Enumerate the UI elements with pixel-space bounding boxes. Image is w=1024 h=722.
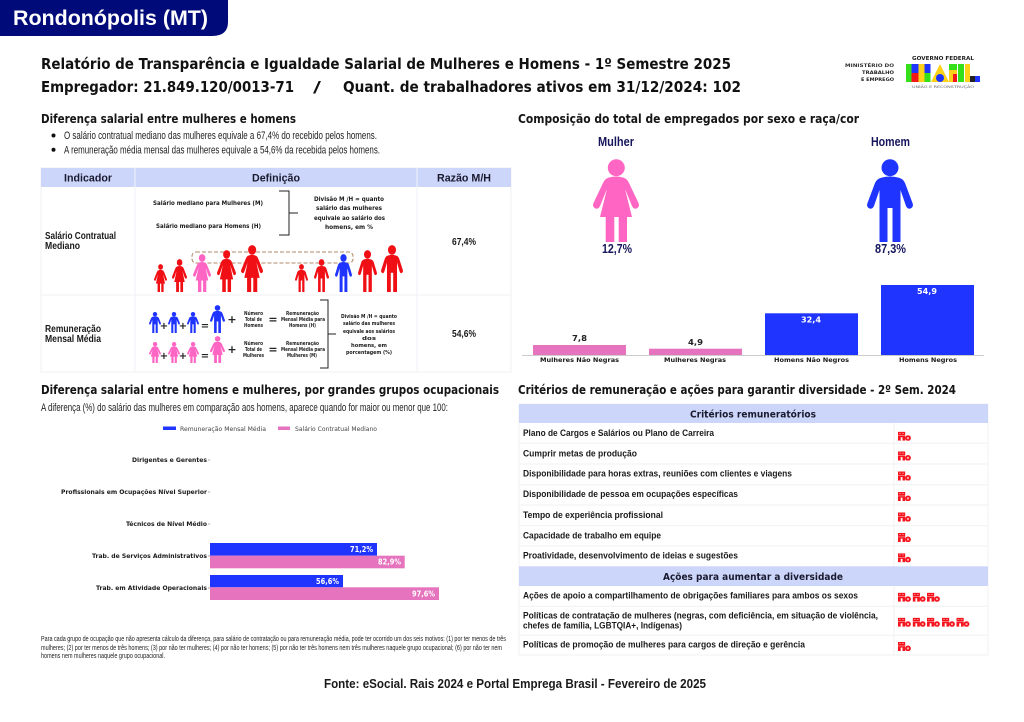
header: remuneration criteria: Critérios remuneratórios xyxy=(690,408,816,420)
legend: occupational chart xyxy=(163,425,377,433)
header: remuneration criteria xyxy=(519,404,988,423)
bracket: median definition xyxy=(279,191,298,235)
text block: footnote: Para cada grupo de ocupação que não apresenta cálculo da diferença, para salário de contratação ou para remuneração média, pode ter ocorrido um dos seis motivos: (1) por ter menos de três xyxy=(41,636,506,643)
row label: average pay: Remuneração xyxy=(45,323,101,335)
bar chart: occupational groups: Técnicos de Nível Médio xyxy=(126,520,208,528)
panel: criteria table xyxy=(519,404,988,655)
definition: division text: equivale ao salário dos xyxy=(314,214,385,222)
logos: ministry and federal government xyxy=(845,56,980,89)
row label: contractual salary xyxy=(45,231,116,252)
rows: diversity actions xyxy=(523,591,968,651)
bar chart: occupational groups: Trab. de Serviços Administrativos xyxy=(92,552,207,560)
logos: ministry and federal government: E EMPREGO xyxy=(861,77,894,83)
bar chart: sex and race composition: Mulheres Não Negras xyxy=(540,356,619,364)
bar chart: sex and race composition: 32,4 xyxy=(801,316,821,324)
logos: ministry and federal government: MINISTÉRIO DO xyxy=(845,61,894,69)
rows: diversity actions: Ações de apoio a compartilhamento de obrigações familiares para ambos os sexos xyxy=(523,591,858,602)
heading: occupational groups: Diferença salarial entre homens e mulheres, por grandes grupos ocupacionais xyxy=(41,382,499,397)
heading: composition: Composição do total de empregados por sexo e raça/cor xyxy=(518,111,860,126)
value: average pay ratio: 54,6% xyxy=(452,328,477,340)
panel: man share xyxy=(867,134,913,256)
bar chart: occupational groups: 71,2% xyxy=(350,545,373,554)
row label: average pay: Mensal Média xyxy=(45,333,101,345)
bar chart: occupational groups xyxy=(61,456,439,600)
definition: median salary labels xyxy=(153,199,263,230)
rows: remuneration criteria: Plano de Cargos e Salários ou Plano de Carreira xyxy=(523,428,715,439)
text block: salary bullets xyxy=(52,130,380,156)
logos: ministry and federal government: GOVERNO FEDERAL xyxy=(912,56,974,62)
icon row: median people xyxy=(154,245,403,292)
bar chart: sex and race composition: Mulheres Negras xyxy=(664,356,726,364)
rows: diversity actions: Políticas de contratação de mulheres (negras, com deficiência, em situação de violência, xyxy=(523,610,878,621)
rows: remuneration criteria: Capacidade de trabalho em equipe xyxy=(523,530,661,541)
bar chart: occupational groups: Trab. em Atividade Operacionais xyxy=(96,584,207,592)
title: Empregador: 21.849.120/0013-71 xyxy=(41,78,294,96)
panel: indicator table xyxy=(41,168,511,372)
panel: indicator table: Razão M/H xyxy=(437,172,491,184)
definition: division text, average pay: dos xyxy=(362,336,376,342)
formula: women average pay: = xyxy=(201,351,209,362)
definition: division text, average pay: equivale aos salários xyxy=(343,328,395,335)
formula: women average pay: + xyxy=(227,343,237,356)
row label: contractual salary: Salário Contratual xyxy=(45,231,116,242)
bar chart: sex and race composition xyxy=(522,285,984,364)
definition: division text: salário das mulheres xyxy=(316,204,382,212)
bar chart: sex and race composition: Homens Negros xyxy=(899,356,957,364)
bar chart: sex and race composition: Homens Não Negros xyxy=(774,356,849,364)
rows: remuneration criteria: Proatividade, desenvolvimento de ideias e sugestões xyxy=(523,551,738,562)
header: diversity actions: Ações para aumentar a diversidade xyxy=(663,572,843,583)
formula: women average pay: + xyxy=(179,351,187,362)
bar chart: occupational groups: Profissionais em Ocupações Nível Superior xyxy=(61,488,208,496)
rows: remuneration criteria: Tempo de experiência profissional xyxy=(523,510,663,521)
rows: remuneration criteria xyxy=(523,428,910,562)
text block: salary bullets: O salário contratual mediano das mulheres equivale a 67,4% do recebido pelos homens. xyxy=(64,130,377,142)
text block: salary bullets: A remuneração média mensal das mulheres equivale a 54,6% da recebida pelos homens. xyxy=(64,144,380,156)
logos: ministry and federal government: UNIÃO E RECONSTRUÇÃO xyxy=(912,84,974,89)
bar chart: sex and race composition: 4,9 xyxy=(688,338,703,347)
formula: men average pay: + xyxy=(160,321,168,332)
formula: women average pay: Total de xyxy=(245,347,263,353)
formula: men average pay: Homens xyxy=(244,323,263,329)
panel: woman share xyxy=(593,134,639,256)
rows: diversity actions: chefes de família, LGBTQIA+, Indígenas) xyxy=(523,620,682,631)
formula: women average pay: + xyxy=(160,351,168,362)
panel: indicator table: Indicador xyxy=(64,172,113,184)
formula: women average pay: Número xyxy=(244,340,264,347)
definition: division text, average pay: salário das mulheres xyxy=(343,320,395,327)
panel: woman share: 12,7% xyxy=(602,241,632,256)
row label: contractual salary: Mediano xyxy=(45,241,80,252)
bar chart: occupational groups: 56,6% xyxy=(316,577,339,586)
definition: division text xyxy=(314,195,385,231)
banner: city name xyxy=(0,0,228,36)
text block: footnote: mulheres; (2) por ter menos de três homens; (3) por não ter mulheres; (4) por não ter homens; (5) por não ter três homens nem três mulheres naquele grupo ocupacional; (6) por não ter nem xyxy=(41,645,502,652)
bar chart: occupational groups: 82,9% xyxy=(378,558,401,566)
definition: division text: homens, em % xyxy=(325,223,374,231)
formula: women average pay: Mulheres (M) xyxy=(287,353,317,359)
logos: ministry and federal government: TRABALHO xyxy=(862,70,894,76)
formula: men average pay: Homens (H) xyxy=(289,323,316,329)
formula: men average pay: = xyxy=(268,313,278,326)
value: median ratio: 67,4% xyxy=(452,236,477,248)
definition: division text, average pay xyxy=(341,314,397,356)
definition: division text: Divisão M /H = quanto xyxy=(314,195,385,203)
formula: men average pay xyxy=(149,305,325,333)
formula: men average pay: Remuneração xyxy=(286,311,320,317)
panel: woman share: Mulher xyxy=(598,134,634,149)
heading: salary difference: Diferença salarial entre mulheres e homens xyxy=(41,111,296,126)
bracket: average pay definition xyxy=(320,300,336,368)
definition: median salary labels: Salário mediano para Mulheres (M) xyxy=(153,199,263,207)
rows: remuneration criteria: Disponibilidade de pessoa em ocupações específicas xyxy=(523,489,738,500)
panel: indicator table: Definição xyxy=(252,172,300,184)
rows: diversity actions: Políticas de promoção de mulheres para cargos de direção e gerência xyxy=(523,639,806,650)
text block: occupational note: A diferença (%) do salário das mulheres em comparação aos homens, aparece quando for maior ou menor que 100: xyxy=(41,402,448,414)
formula: men average pay: + xyxy=(179,321,187,332)
legend: occupational chart: Remuneração Mensal Média xyxy=(180,425,266,433)
legend: occupational chart: Salário Contratual Mediano xyxy=(295,425,377,433)
formula: men average pay: Número xyxy=(244,310,264,317)
row label: average pay xyxy=(45,323,101,345)
formula: women average pay: Mensal Média para xyxy=(281,346,325,353)
header: diversity actions xyxy=(519,566,988,586)
text block: footnote: homens nem mulheres naquele grupo ocupacional. xyxy=(41,653,165,660)
formula: men average pay: = xyxy=(201,321,209,332)
source note: Fonte: eSocial. Rais 2024 e Portal Emprega Brasil - Fevereiro de 2025 xyxy=(324,676,706,691)
title xyxy=(41,55,741,96)
bar chart: sex and race composition: 7,8 xyxy=(572,334,587,343)
rows: remuneration criteria: Cumprir metas de produção xyxy=(523,448,637,459)
bar chart: sex and race composition: 54,9 xyxy=(917,287,937,296)
definition: division text, average pay: homens, em xyxy=(351,343,387,349)
panel: man share: 87,3% xyxy=(875,241,906,256)
bar chart: occupational groups: Dirigentes e Gerentes xyxy=(132,456,207,464)
text block: footnote xyxy=(41,636,506,660)
definition: median salary labels: Salário mediano para Homens (H) xyxy=(156,222,261,230)
title: Relatório de Transparência e Igualdade Salarial de Mulheres e Homens - 1º Semestre 2025 xyxy=(41,55,731,73)
formula: women average pay xyxy=(149,336,325,363)
formula: men average pay: + xyxy=(227,313,237,326)
bar chart: occupational groups: 97,6% xyxy=(412,590,435,598)
formula: women average pay: Remuneração xyxy=(286,341,320,347)
rows: remuneration criteria: Disponibilidade para horas extras, reuniões com clientes e viagens xyxy=(523,469,792,480)
formula: men average pay: Total de xyxy=(245,317,263,323)
definition: division text, average pay: porcentagem (%) xyxy=(346,350,392,356)
panel: man share: Homem xyxy=(871,134,910,149)
definition: division text, average pay: Divisão M /H = quanto xyxy=(341,314,397,320)
formula: women average pay: Mulheres xyxy=(243,353,264,359)
formula: women average pay: = xyxy=(268,343,278,356)
title: / xyxy=(313,78,322,96)
formula: men average pay: Mensal Média para xyxy=(281,316,325,323)
banner: city name: Rondonópolis (MT) xyxy=(13,7,208,30)
title: Quant. de trabalhadores ativos em 31/12/2024: 102 xyxy=(343,78,741,96)
